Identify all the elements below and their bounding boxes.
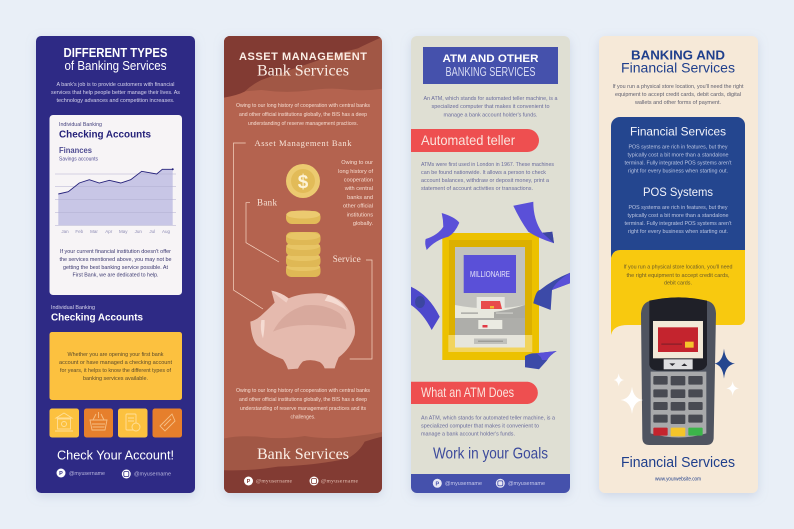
blue box: terminal. Fully integrated POS systems aren't	[624, 160, 732, 166]
area chart: savings: Apr	[105, 229, 113, 234]
yellow shape	[611, 250, 745, 335]
card text: getting the best banking service possible. At	[63, 265, 168, 271]
website: www.yourwebsite.com	[655, 476, 701, 482]
icon: bank	[50, 408, 79, 438]
area chart: savings: Feb	[75, 229, 84, 234]
paragraph: automated teller: ATMs were first used in London in 1967. These machines	[421, 162, 554, 168]
card text: First Bank, we are dedicated to help.	[72, 272, 159, 278]
icon: bill and coin	[118, 408, 148, 438]
social handles: P	[247, 479, 251, 485]
yellow shape: If you run a physical store location, you'll need	[624, 265, 732, 271]
blue box: terminal. Fully integrated POS systems aren't	[624, 221, 732, 227]
blue box: Financial Services	[630, 125, 726, 139]
intro text: Owing to our long history of cooperation with central banks	[236, 103, 370, 109]
paragraph: automated teller: account balances, withdraw or deposit money, print a	[421, 178, 550, 184]
card: checking accounts chart	[50, 115, 182, 295]
intro text	[424, 96, 558, 118]
card: checking accounts chart: Checking Accounts	[59, 128, 151, 140]
intro text: A bank's job is to provide customers with financial	[56, 82, 174, 88]
intro text: understanding of reserve management practices.	[248, 121, 358, 127]
yellow shape: debit cards.	[664, 281, 692, 287]
footer band with social handles	[411, 474, 570, 493]
paragraph: automated teller: statement of account activities or transactions.	[421, 186, 533, 192]
side text: other official	[343, 204, 373, 210]
title block: ATM AND OTHER	[442, 53, 539, 65]
title: different types: DIFFERENT TYPES	[64, 45, 168, 60]
intro text: equipment to accept credit cards, debit cards, digital	[615, 92, 741, 98]
blue box: typically cost a bit more than a standalone	[628, 213, 728, 219]
social handles	[244, 476, 359, 486]
side text: Owing to our	[341, 160, 373, 166]
intro text	[51, 82, 180, 104]
area chart: savings: Jan	[61, 229, 69, 234]
footer band with social handles: P	[435, 481, 439, 487]
title: asset management: Bank Services	[257, 62, 349, 80]
intro text: and other official institutions globally, the BIS has a deep	[239, 112, 367, 118]
bottom text: and other official institutions globally, the BIS has a deep	[239, 397, 367, 403]
title: Financial Services	[621, 60, 735, 76]
area chart: savings: Jul	[149, 229, 155, 234]
intro text: technology advances and competition increases.	[56, 98, 175, 104]
paragraph: automated teller: can be found nationwide. It allows a person to check	[421, 170, 546, 176]
panel: banking and financial services	[599, 36, 758, 493]
area chart: savings	[55, 168, 176, 234]
title: asset management: ASSET MANAGEMENT	[239, 51, 367, 63]
blue box: typically cost a bit more than a standalone	[628, 153, 728, 159]
blue box	[611, 117, 745, 258]
side text: banks and	[347, 195, 373, 201]
social handles: P	[59, 471, 63, 477]
intro text: wallets and other forms of payment.	[634, 100, 721, 106]
illustration: flying banknotes	[411, 202, 570, 369]
paragraph: what an ATM does: manage a bank account holder's funds.	[421, 432, 515, 438]
banner: what an ATM does	[411, 382, 538, 404]
blue box: right for every business when starting out.	[628, 168, 728, 174]
icon: coin stack	[286, 210, 320, 277]
intro text	[612, 84, 744, 106]
side text: institutions	[347, 212, 373, 218]
callout: yellow box: banking services available.	[83, 376, 148, 382]
illustration: ATM machine	[442, 233, 539, 360]
social handles: @myusername	[69, 471, 105, 477]
banner: automated teller	[411, 129, 539, 152]
banner: automated teller: Automated teller	[421, 132, 515, 148]
intro text: An ATM, which stands for automated teller machine, is a	[424, 96, 558, 102]
footer heading: Bank Services	[257, 446, 349, 463]
yellow shape: the right equipment to accept credit cards,	[626, 273, 730, 279]
area chart: savings: Jun	[135, 229, 142, 234]
side text: globally.	[353, 221, 373, 227]
blue box: POS systems are rich in features, but they	[628, 145, 728, 151]
side text: with central	[344, 186, 373, 192]
footer band with social handles: @myusername	[445, 481, 482, 487]
intro text: specialized computer that makes it convenient to	[432, 104, 550, 110]
label: asset management bank: Asset Management Bank	[254, 138, 352, 148]
panel: asset management bank services	[218, 30, 385, 497]
side text	[338, 160, 373, 227]
illustration: ATM machine: MILLIONAIRE	[470, 269, 510, 279]
card text: If your current financial institution doesn't offer	[60, 249, 171, 255]
social handles: @myusername	[134, 472, 171, 478]
area chart: savings: Mar	[90, 229, 98, 234]
intro text	[236, 103, 370, 127]
side text: long history of	[338, 169, 373, 175]
label: service: Service	[333, 254, 361, 264]
title: different types	[64, 45, 168, 73]
title block: BANKING SERVICES	[446, 65, 536, 79]
icon: dollar coin: $	[298, 172, 309, 193]
heading: checking accounts	[51, 305, 143, 324]
social handles	[56, 468, 171, 478]
footer heading: Financial Services	[621, 455, 735, 471]
label: bank: Bank	[257, 198, 278, 208]
label: asset management bank	[234, 138, 352, 309]
wave backgrounds	[218, 30, 385, 497]
card text: the services mentioned above, you may not be	[60, 257, 172, 263]
blue box: POS systems are rich in features, but they	[628, 205, 728, 211]
sparkles	[614, 349, 739, 414]
social handles: @myusername	[321, 478, 359, 484]
callout: yellow box: for years, it helps to know the different types of	[60, 368, 171, 374]
paragraph: what an ATM does: An ATM, which stands for automated teller machine, is a	[421, 416, 556, 422]
card: checking accounts chart: Savings accounts	[59, 156, 98, 162]
card: checking accounts chart: Finances	[59, 146, 93, 155]
paragraph: automated teller	[421, 162, 554, 192]
footer band with social handles: @myusername	[508, 481, 545, 487]
title: asset management	[239, 51, 367, 80]
heading: checking accounts: Individual Banking	[51, 305, 95, 311]
illustration: card terminal	[641, 297, 716, 445]
icon: piggy bank	[250, 291, 355, 369]
callout: yellow box	[50, 332, 182, 400]
bottom text: Owing to our long history of cooperation with central banks	[236, 388, 370, 394]
panel: different types of banking services	[36, 36, 195, 493]
callout: yellow box: account or have managed a checking account	[59, 360, 172, 366]
social handles: @myusername	[256, 478, 293, 484]
title	[621, 48, 735, 76]
bottom text	[236, 388, 370, 420]
area chart: savings: May	[119, 229, 128, 234]
callout: yellow box: Whether you are opening your first bank	[68, 352, 164, 358]
paragraph: what an ATM does: specialized computer that makes it convenient to	[421, 424, 539, 430]
blue box: right for every business when starting out.	[628, 229, 728, 235]
footer heading: Work in your Goals	[433, 446, 548, 463]
heading: checking accounts: Checking Accounts	[51, 312, 143, 324]
intro text: If you run a physical store location, you'll need the right	[612, 84, 744, 90]
title block	[423, 47, 558, 84]
icon: basket	[84, 408, 113, 438]
banner: what an ATM does: What an ATM Does	[421, 384, 514, 400]
title: BANKING AND	[631, 48, 725, 62]
label: bank	[246, 198, 279, 262]
intro text: services that help people better manage their lives. As	[51, 90, 180, 96]
icon: tag	[152, 408, 182, 438]
bottom text: challenges.	[290, 414, 316, 420]
title: different types: of Banking Services	[64, 59, 166, 73]
intro text: manage a bank account holder's funds.	[444, 112, 538, 118]
card text	[60, 249, 172, 278]
area chart: savings: Aug	[162, 229, 170, 234]
label: service	[333, 254, 372, 359]
card: checking accounts chart: Individual Banking	[59, 122, 102, 128]
footer heading: Check Your Account!	[57, 448, 174, 462]
paragraph: what an ATM does	[421, 416, 556, 438]
bottom text: understanding of reserve management practices and its	[240, 406, 366, 412]
panel: ATM and other banking services	[411, 36, 570, 493]
icon: dollar coin	[286, 164, 320, 198]
blue box: POS Systems	[643, 185, 713, 199]
side text: cooperation	[344, 178, 373, 184]
